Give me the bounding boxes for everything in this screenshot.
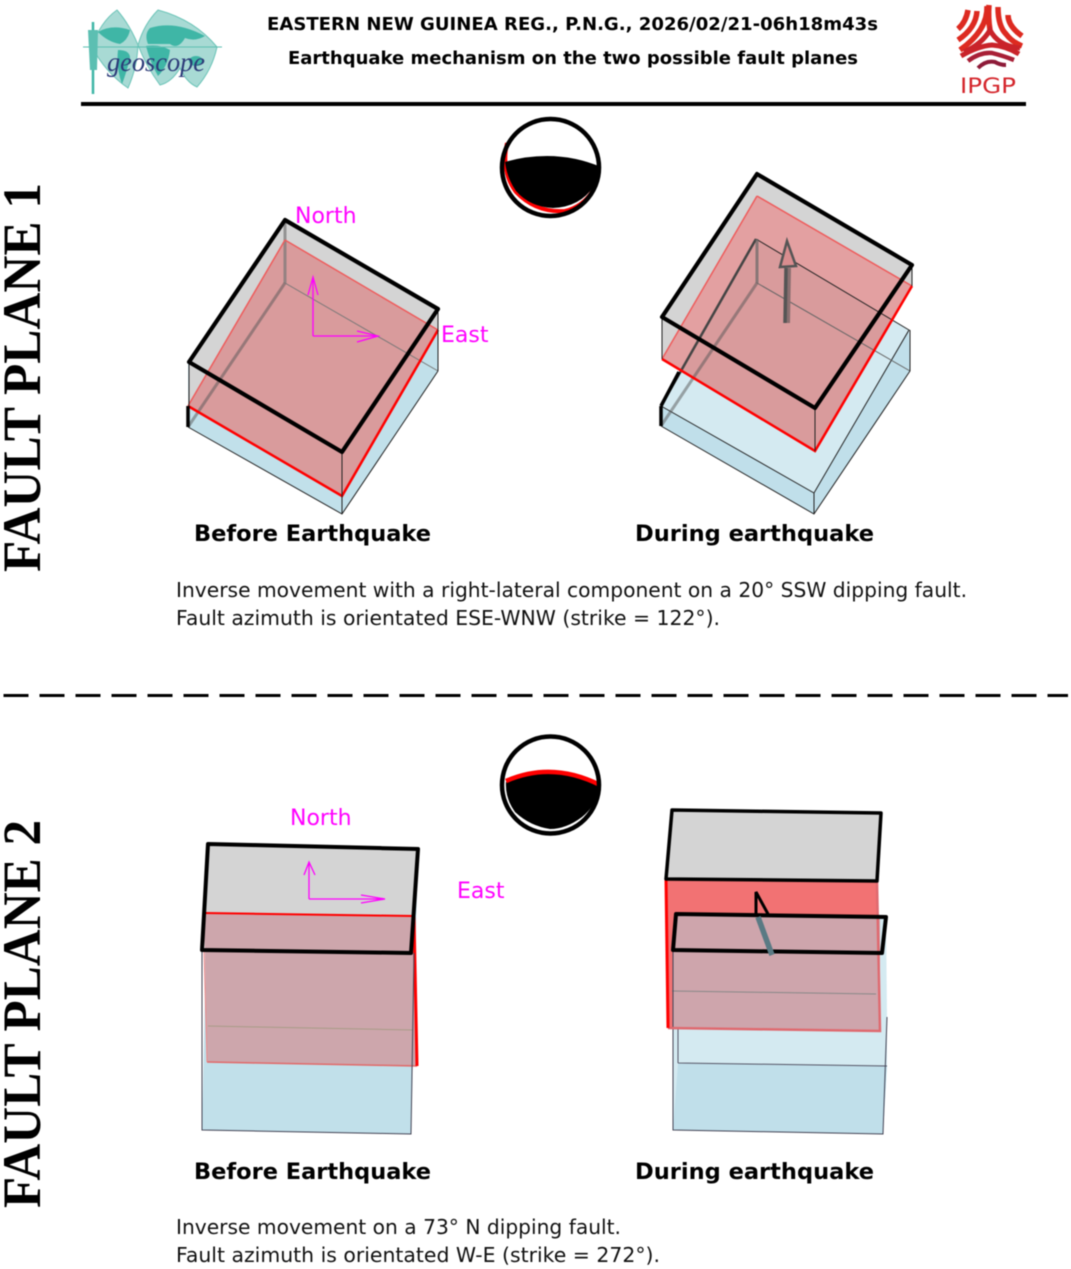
label: north: North: [295, 204, 357, 229]
beachball: fault plane 1: [502, 119, 601, 216]
arrow: slip direction plane 1: [780, 241, 796, 323]
block diagram: fault plane 1 before: [188, 220, 438, 514]
description: fault plane 2: Inverse movement on a 73° N dipping fault.: [176, 1215, 621, 1239]
compass arrows: fault plane 2: [304, 862, 385, 903]
description: fault plane 2: [176, 1215, 660, 1267]
caption: during plane 1: During earthquake: [635, 522, 874, 547]
description: fault plane 1: Inverse movement with a right-lateral component on a 20° SSW dipping fault.: [176, 578, 967, 602]
caption: before plane 1: Before Earthquake: [194, 522, 431, 547]
logo: IPGP: [958, 5, 1022, 98]
title: EASTERN NEW GUINEA REG., P.N.G., 2026/02/21-06h18m43s: [267, 14, 878, 35]
compass arrows: fault plane 1: [308, 277, 378, 342]
subtitle: Earthquake mechanism on the two possible fault planes: [288, 48, 858, 69]
block diagram: fault plane 2 before: [202, 844, 418, 1134]
description: fault plane 2: Fault azimuth is orientated W-E (strike = 272°).: [176, 1243, 660, 1267]
logo: geoscope: [83, 10, 222, 94]
caption: before plane 2: Before Earthquake: [194, 1160, 431, 1185]
beachball: fault plane 2: [502, 736, 600, 834]
block diagram: fault plane 1 during: [661, 174, 912, 514]
logo: IPGP: IPGP: [960, 74, 1016, 98]
description: fault plane 1: [176, 578, 967, 630]
label: north: North: [290, 806, 352, 831]
arrow: slip direction plane 2: [756, 892, 772, 955]
description: fault plane 1: Fault azimuth is orientated ESE-WNW (strike = 122°).: [176, 606, 720, 630]
logo: geoscope: geoscope: [107, 47, 205, 77]
caption: during plane 2: During earthquake: [635, 1160, 874, 1185]
block diagram: fault plane 2 during: [666, 810, 887, 1134]
label: east: East: [457, 879, 505, 904]
label: east: East: [441, 323, 489, 348]
